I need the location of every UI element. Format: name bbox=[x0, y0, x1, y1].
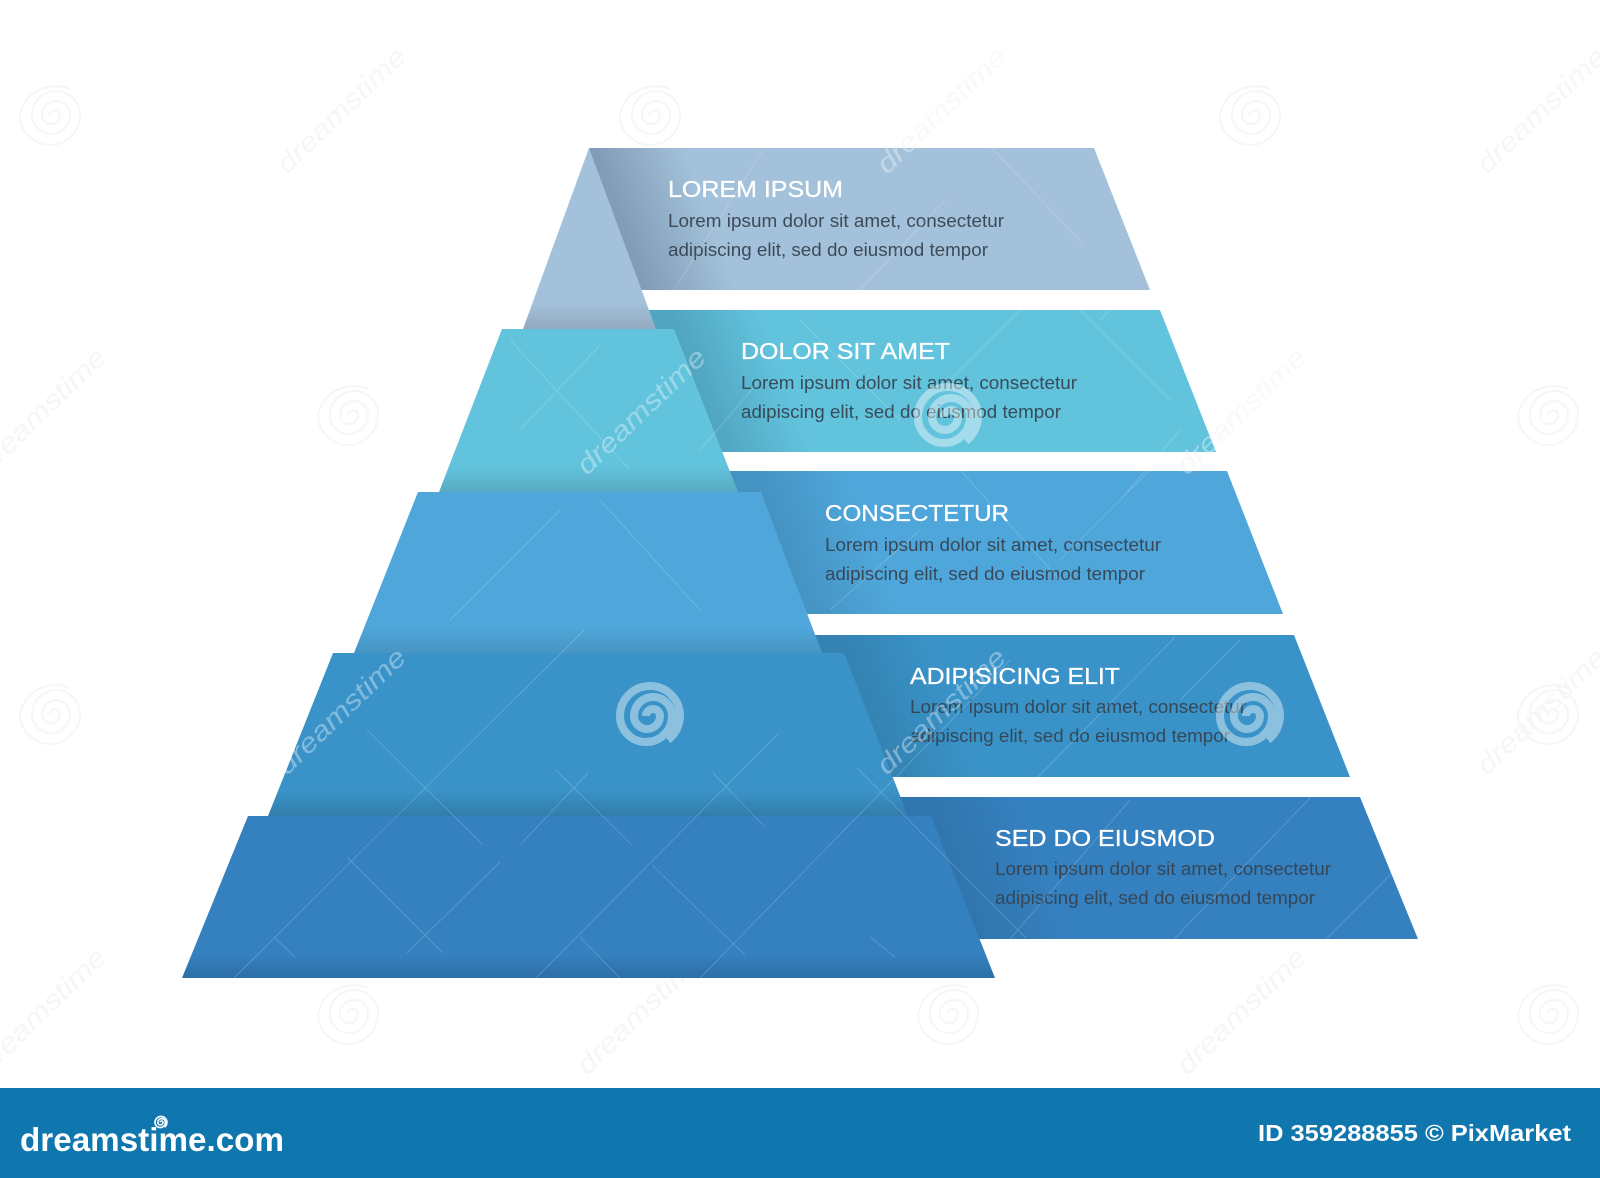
tier 5 base bbox=[182, 816, 995, 978]
faint watermarks on white background: dreamstime bbox=[1470, 41, 1600, 179]
panel: band 5 sed do eiusmod: Lorem ipsum dolor sit amet, consectetur bbox=[995, 859, 1331, 879]
faint watermarks on white background: dreamstime bbox=[570, 942, 712, 1080]
watermark line pattern over shapes bbox=[234, 147, 1392, 978]
chart: left pyramid tiers bbox=[182, 148, 995, 978]
watermark text over shapes: dreamstime bbox=[270, 642, 412, 780]
footer bar bbox=[0, 1088, 1600, 1178]
watermark text over shapes: dreamstime bbox=[870, 642, 1012, 780]
watermark text over shapes: dreamstime bbox=[870, 41, 1012, 179]
panel: band 5 sed do eiusmod bbox=[890, 797, 1418, 939]
watermark text over shapes: dreamstime bbox=[1170, 342, 1312, 480]
panel: band 4 adipisicing elit bbox=[810, 635, 1350, 777]
panel: band 3 consectetur: adipiscing elit, sed do eiusmod tempor bbox=[825, 564, 1145, 584]
tier 2 bbox=[439, 329, 738, 492]
panel: band 2 dolor sit amet bbox=[640, 310, 1216, 452]
watermark spirals over shapes bbox=[620, 387, 1280, 742]
footer logo spiral bbox=[155, 1116, 167, 1128]
faint watermarks on white background: dreamstime bbox=[1470, 642, 1600, 780]
panel: band 3 consectetur bbox=[725, 471, 1283, 614]
faint watermarks on white background: dreamstime bbox=[270, 41, 412, 179]
tier 3 bbox=[354, 492, 822, 653]
tier 1 apex bbox=[523, 148, 656, 329]
tier 4 bbox=[268, 653, 908, 816]
panel: band 1 lorem ipsum bbox=[589, 148, 1150, 290]
footer logo text: dreamstime.com bbox=[20, 1121, 284, 1158]
faint watermarks on white background: dreamstime bbox=[1170, 942, 1312, 1080]
panel: band 4 adipisicing elit: Lorem ipsum dolor sit amet, consectetur bbox=[910, 697, 1246, 717]
watermark text over shapes bbox=[270, 41, 1312, 780]
panel: band 5 sed do eiusmod: SED DO EIUSMOD bbox=[995, 825, 1215, 851]
panel: band 1 lorem ipsum: LOREM IPSUM bbox=[668, 176, 843, 202]
panel: band 2 dolor sit amet: Lorem ipsum dolor sit amet, consectetur bbox=[741, 373, 1077, 393]
footer image id: ID 359288855 © PixMarket bbox=[1258, 1120, 1571, 1146]
panel: band 1 lorem ipsum: adipiscing elit, sed do eiusmod tempor bbox=[668, 240, 988, 260]
panel: band 5 sed do eiusmod: adipiscing elit, sed do eiusmod tempor bbox=[995, 888, 1315, 908]
panel: band 4 adipisicing elit: adipiscing elit, sed do eiusmod tempor bbox=[910, 726, 1230, 746]
faint watermarks on white background: dreamstime bbox=[870, 41, 1012, 179]
panel: band 3 consectetur: CONSECTETUR bbox=[825, 500, 1009, 526]
panel: band 1 lorem ipsum: Lorem ipsum dolor sit amet, consectetur bbox=[668, 211, 1004, 231]
panel: band 4 adipisicing elit: ADIPISICING ELIT bbox=[910, 663, 1120, 689]
panel: band 2 dolor sit amet: DOLOR SIT AMET bbox=[741, 338, 950, 364]
panel: band 3 consectetur: Lorem ipsum dolor sit amet, consectetur bbox=[825, 535, 1161, 555]
panel: band 2 dolor sit amet: adipiscing elit, sed do eiusmod tempor bbox=[741, 402, 1061, 422]
faint watermarks on white background: dreamstime bbox=[1170, 342, 1312, 480]
watermark text over shapes: dreamstime bbox=[570, 342, 712, 480]
